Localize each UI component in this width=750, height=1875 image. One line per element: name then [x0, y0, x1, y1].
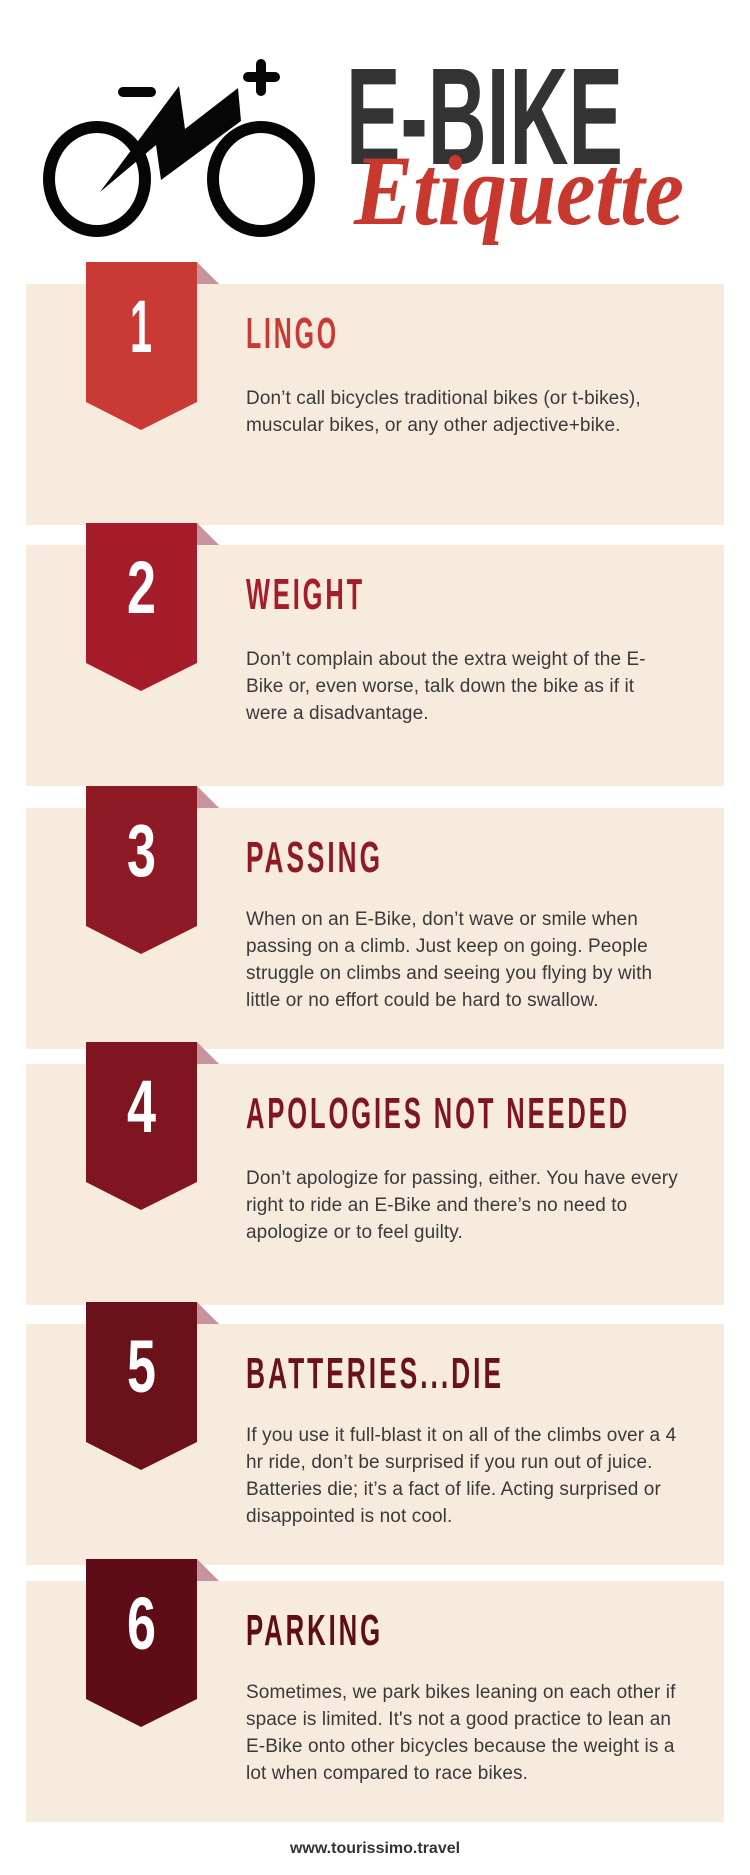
text: batteries: Batteries die; it’s a fact of life. Acting surprised or — [246, 1479, 661, 1500]
text: lingo: Don’t call bicycles traditional bikes (or t-bikes), — [246, 388, 641, 409]
text: apologies: apologize or to feel guilty. — [246, 1222, 463, 1243]
text: lingo — [246, 388, 641, 436]
ribbon 5 — [86, 1302, 219, 1470]
text: batteries: disappointed is not cool. — [246, 1506, 452, 1527]
text: apologies — [246, 1168, 678, 1243]
text: parking: lot when compared to race bikes. — [246, 1763, 528, 1784]
ribbon 4: 4 — [127, 1065, 156, 1148]
ribbon 1 — [86, 262, 219, 430]
title: E-BIKE Etiquette — [346, 40, 684, 246]
text: batteries — [246, 1425, 676, 1527]
text: passing: struggle on climbs and seeing you flying by with — [246, 963, 652, 984]
icon: left wheel — [49, 127, 145, 231]
icon: right wheel — [213, 127, 309, 231]
panel: 1 lingo — [26, 284, 724, 525]
ribbon 6: 6 — [127, 1582, 156, 1665]
text: parking: space is limited. It's not a good practice to lean an — [246, 1709, 671, 1730]
panel: 6 parking — [26, 1581, 724, 1822]
ribbon 2: 2 — [127, 546, 156, 629]
ribbon 1: 1 — [130, 285, 152, 368]
text: passing: When on an E-Bike, don’t wave or smile when — [246, 909, 638, 930]
panel: 5 batteries — [26, 1324, 724, 1565]
footer url: www.tourissimo.travel — [290, 1840, 460, 1857]
text: passing: little or no effort could be hard to swallow. — [246, 990, 599, 1011]
text: passing — [246, 909, 652, 1011]
ribbon 4 — [86, 1042, 219, 1210]
ribbon 6 — [86, 1559, 219, 1727]
icon: lightning bolt frame — [100, 86, 241, 192]
panel: 2 weight — [26, 545, 724, 786]
header logo: e-bike icon — [43, 59, 315, 237]
ribbon 2 — [86, 523, 219, 691]
ribbon 3 — [86, 786, 219, 954]
text: batteries: hr ride, don’t be surprised if you run out of juice. — [246, 1452, 653, 1473]
text: parking: Sometimes, we park bikes leaning on each other if — [246, 1682, 675, 1703]
text: weight: Bike or, even worse, talk down the bike as if it — [246, 676, 634, 697]
text: lingo: muscular bikes, or any other adjective+bike. — [246, 415, 621, 436]
title: E-BIKE Etiquette: Etiquette — [353, 135, 684, 246]
text: apologies: Don’t apologize for passing, either. You have every — [246, 1168, 678, 1189]
icon: minus sign — [118, 87, 156, 97]
text: weight: Don’t complain about the extra weight of the E- — [246, 649, 646, 670]
text: batteries: If you use it full-blast it on all of the climbs over a 4 — [246, 1425, 676, 1446]
text: weight — [246, 649, 646, 724]
text: apologies: right to ride an E-Bike and there’s no need to — [246, 1195, 627, 1216]
text: weight: were a disadvantage. — [246, 703, 429, 724]
icon: plus sign — [243, 59, 280, 96]
panel: 3 passing — [26, 808, 724, 1049]
text: passing: passing on a climb. Just keep on going. People — [246, 936, 648, 957]
text: parking — [246, 1682, 676, 1784]
text: parking: E-Bike onto other bicycles because the weight is a — [246, 1736, 675, 1757]
panel: 4 apologies — [26, 1064, 724, 1305]
ribbon 3: 3 — [127, 809, 156, 892]
ribbon 5: 5 — [127, 1325, 156, 1408]
